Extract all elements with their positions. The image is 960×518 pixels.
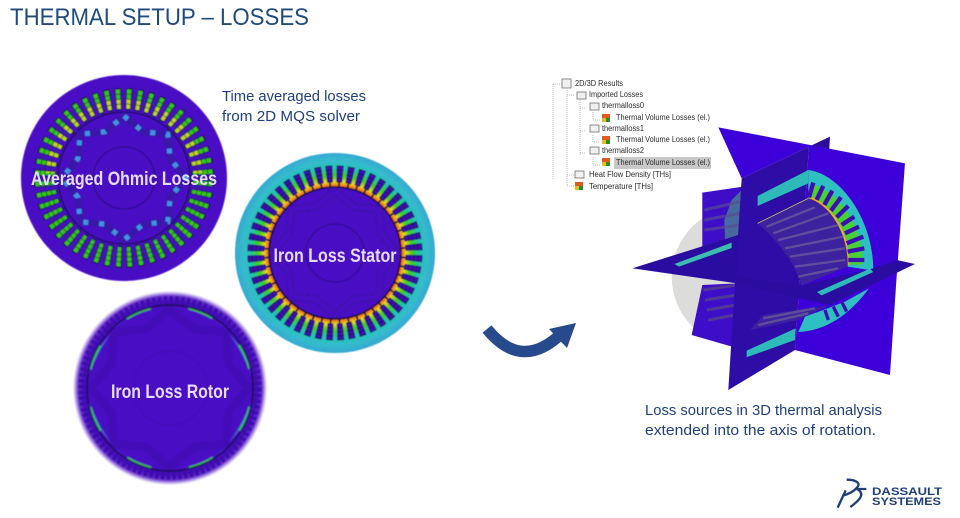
text: loss sources in 3D: extended into the axis of rotation.: [645, 422, 876, 439]
tree labels: thermalloss1: [602, 124, 645, 133]
dark plane front: [728, 147, 809, 390]
label: averaged ohmic losses: Averaged Ohmic Losses: [31, 168, 217, 190]
tree labels: Imported Losses: [589, 90, 643, 99]
upper section strip: [758, 170, 808, 206]
text: time averaged losses: from 2D MQS solver: [222, 108, 360, 125]
back top corner of dark plane: [809, 137, 830, 170]
panel: iron loss stator motor: [235, 153, 435, 353]
lower turquoise section: [798, 288, 869, 332]
title: THERMAL SETUP – LOSSES: [10, 4, 309, 31]
lower section strip: [747, 328, 796, 357]
highlighted row: [614, 157, 711, 169]
text: loss sources in 3D: Loss sources in 3D thermal analysis: [645, 402, 882, 419]
tree connector lines: [553, 84, 600, 186]
tree labels: Thermal Volume Losses (el.): [616, 158, 710, 167]
stator cross-section: [235, 153, 435, 353]
label: iron loss rotor: Iron Loss Rotor: [111, 381, 229, 403]
tree labels: Thermal Volume Losses (el.): [616, 135, 710, 144]
arrow: [487, 323, 576, 352]
tree labels: [575, 79, 710, 191]
logo wordmark: DASSAULT: [872, 486, 942, 498]
label: iron loss stator: Iron Loss Stator: [273, 245, 397, 267]
motor cross-section: [21, 75, 227, 281]
upper left plane: [702, 187, 743, 252]
tree labels: Thermal Volume Losses (el.): [616, 113, 710, 122]
stator slots: [809, 183, 864, 260]
grey housing disc: [672, 206, 813, 347]
lower left plane: [692, 283, 738, 347]
3D thermal section planes: [632, 127, 915, 390]
tree cube icons: [575, 114, 610, 190]
lower cylinder section: [750, 305, 828, 330]
tree labels: thermalloss0: [602, 101, 645, 110]
right dark horizontal plane: [735, 260, 915, 305]
panel: averaged ohmic losses motor: [21, 75, 227, 281]
panel: results tree: [553, 79, 711, 191]
logo: Dassault Systemes: [838, 480, 942, 508]
tree labels: 2D/3D Results: [575, 79, 623, 88]
logo symbol: [838, 480, 866, 508]
panel: iron loss rotor motor: [73, 291, 267, 485]
tree labels: Temperature [THs]: [589, 182, 653, 191]
left dark horizontal plane: [632, 235, 738, 283]
right plane: [718, 127, 905, 375]
tree labels: thermalloss2: [602, 146, 645, 155]
cylinder rotor section: [758, 198, 848, 286]
upper turquoise stator section: [808, 170, 873, 271]
rotor cross-section: [73, 291, 267, 485]
tree folder icons: [562, 79, 599, 178]
tree labels: Heat Flow Density [THs]: [589, 170, 671, 179]
text: time averaged losses: Time averaged losses: [222, 88, 366, 105]
logo: Dassault Systemes: SYSTEMES: [872, 496, 941, 508]
